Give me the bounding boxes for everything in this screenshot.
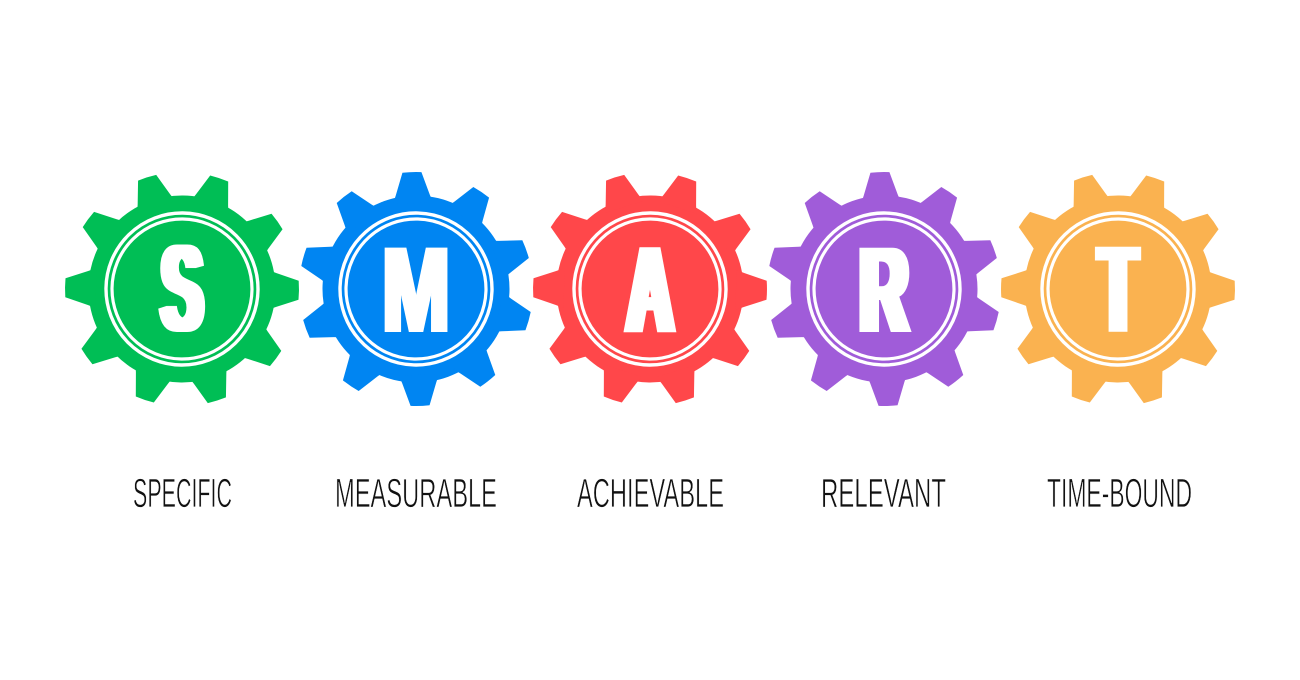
gear: R relevant bbox=[734, 139, 1034, 439]
gear: S specific bbox=[64, 170, 300, 408]
label: measurable: MEASURABLE bbox=[335, 470, 497, 516]
gear: M measurable bbox=[266, 139, 566, 439]
gear: A achievable bbox=[532, 170, 768, 408]
label: relevant: RELEVANT bbox=[821, 470, 946, 516]
letter A: A bbox=[627, 220, 673, 358]
letter S: S bbox=[161, 220, 203, 358]
label: time-bound: TIME-BOUND bbox=[1047, 470, 1192, 516]
gear: T time-bound bbox=[1000, 170, 1236, 408]
label: achievable: ACHIEVABLE bbox=[577, 470, 724, 516]
letter T: T bbox=[1099, 221, 1137, 359]
letter M: M bbox=[382, 222, 450, 359]
letter R: R bbox=[860, 221, 908, 358]
label: specific: SPECIFIC bbox=[133, 470, 232, 516]
